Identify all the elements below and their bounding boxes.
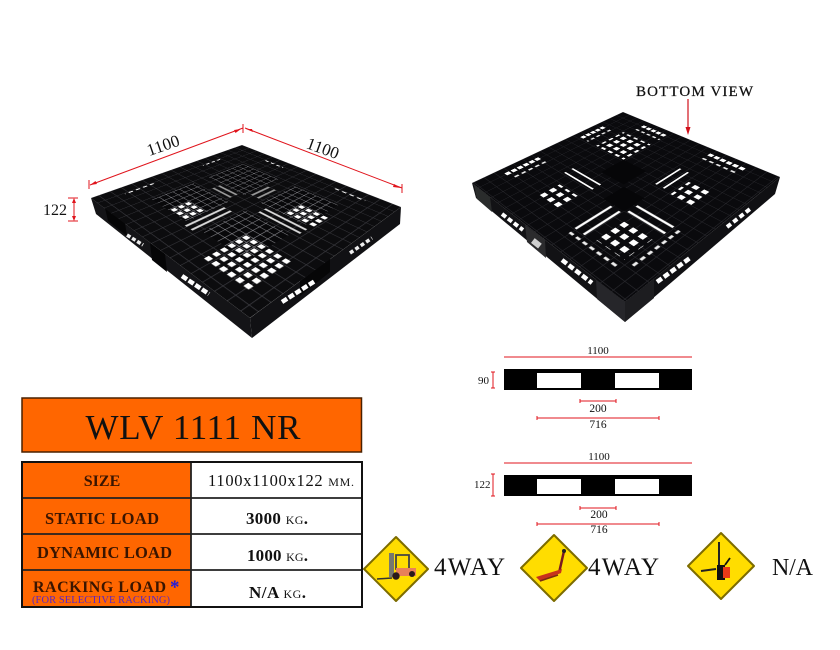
diagram: end elevation 90: [478, 345, 692, 431]
row: racking load: [32, 577, 306, 606]
title: model name: [22, 398, 362, 452]
table: specifications: [22, 462, 362, 607]
diagram: end elevation 90: 90: [478, 375, 490, 387]
text: stacker N/A: N/A: [772, 555, 814, 581]
diagram: end elevation 122: 122: [474, 479, 490, 491]
row: racking load: (FOR SELECTIVE RACKING): [32, 595, 170, 606]
row: size: [84, 471, 354, 490]
icon: pallet jack sign: [521, 535, 587, 601]
title: model name: WLV 1111 NR: [86, 408, 301, 447]
row: racking load: RACKING LOAD: [33, 579, 166, 596]
dimension: pallet length and width: 1100: [304, 134, 342, 163]
icon: forklift sign: [364, 537, 428, 601]
row: racking load: N/A KG.: [249, 583, 306, 602]
diagram: end elevation 122: 1100: [588, 451, 610, 463]
diagram: end elevation 122: 716: [590, 524, 608, 536]
icon: stacker sign: [688, 533, 754, 599]
row: static load: 3000 KG.: [246, 509, 308, 528]
dimension: pallet height 122: 122: [43, 202, 67, 219]
image: pallet bottom view: [472, 112, 780, 322]
row: static load: STATIC LOAD: [45, 509, 159, 528]
row: size: 1100x1100x122 MM.: [208, 471, 354, 490]
diagram: end elevation 122: [474, 451, 692, 536]
diagram: end elevation 90: 200: [589, 403, 607, 415]
callout: bottom view: BOTTOM VIEW: [636, 84, 754, 100]
image: pallet top view: [91, 145, 401, 338]
row: dynamic load: 1000 KG.: [247, 546, 308, 565]
row: dynamic load: [37, 543, 308, 565]
text: forklift 4WAY: 4WAY: [434, 554, 505, 581]
dimension: pallet length and width: 1100: [144, 131, 182, 160]
row: racking load: *: [170, 577, 180, 598]
row: size: SIZE: [84, 473, 120, 490]
dimension: pallet height 122: [43, 198, 78, 221]
row: static load: [45, 509, 308, 528]
callout: bottom view: [636, 84, 754, 135]
diagram: end elevation 90: 716: [589, 419, 607, 431]
diagram: end elevation 90: 1100: [587, 345, 609, 357]
dimension: pallet length and width: [89, 124, 402, 193]
row: dynamic load: DYNAMIC LOAD: [37, 543, 172, 562]
diagram: end elevation 122: 200: [590, 509, 608, 521]
text: pallet jack 4WAY: 4WAY: [588, 554, 659, 581]
